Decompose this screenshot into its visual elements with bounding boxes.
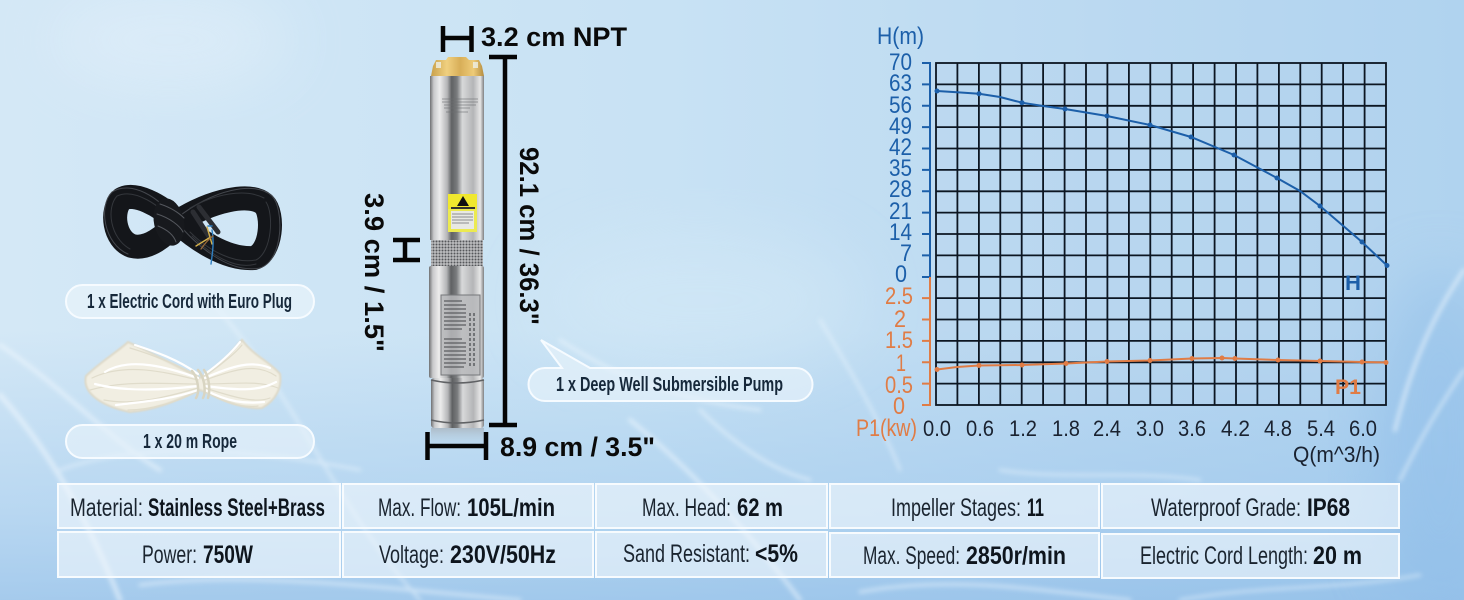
- spec: max flow: Max. Flow:: [378, 494, 461, 522]
- spec: max speed: Max. Speed:: [863, 542, 960, 570]
- head axis labels: 21: [889, 198, 912, 225]
- dimension: 92.1 cm / 36.3 in height: 92.1 cm / 36.3": [514, 147, 544, 325]
- spec: impeller stages: 11: [1027, 494, 1044, 522]
- flow axis labels: 1.2: [1009, 416, 1037, 441]
- power axis labels: 0.5: [885, 372, 913, 399]
- engraved top marking: [442, 99, 478, 112]
- spec: power: 750W: [203, 541, 253, 569]
- callout: deep well submersible pump: 1 x Deep Well Submersible Pump: [556, 374, 783, 396]
- motor nameplate: [441, 295, 480, 375]
- spec: max head: Max. Head:: [642, 494, 731, 522]
- head axis labels: 0: [895, 261, 907, 288]
- dimension: 8.9 cm / 3.5 in: [428, 432, 655, 462]
- left axis: power: [922, 277, 930, 405]
- flow axis labels: 2.4: [1093, 416, 1121, 441]
- flow axis labels: 0.6: [966, 416, 994, 441]
- chart grid: [936, 63, 1386, 405]
- P1 curve label: P1: [1335, 376, 1361, 399]
- flow axis labels: 1.8: [1052, 416, 1080, 441]
- flow axis labels: 6.0: [1349, 416, 1377, 441]
- spec: sand resistant: Sand Resistant:: [623, 540, 750, 568]
- spec: material: Material:: [70, 494, 143, 522]
- pill: electric cord label: 1 x Electric Cord with Euro Plug: [87, 291, 292, 313]
- flow axis labels: 3.0: [1136, 416, 1164, 441]
- dimension: 8.9 cm / 3.5 in: 8.9 cm / 3.5": [500, 432, 655, 462]
- pill: electric cord label: [66, 285, 314, 318]
- head axis labels: 42: [889, 134, 912, 161]
- flow axis labels: 0.0: [923, 416, 951, 441]
- left axis: head: [922, 63, 930, 277]
- flow axis labels: 3.6: [1178, 416, 1206, 441]
- pill: rope label: [66, 425, 314, 458]
- brass top fitting: [431, 57, 484, 76]
- dimension: 92.1 cm / 36.3 in height: [489, 57, 544, 425]
- spec: max speed: [830, 533, 1099, 577]
- base reflection: [431, 428, 484, 448]
- spec: voltage: Voltage:: [379, 541, 444, 569]
- spec: impeller stages: Impeller Stages:: [891, 494, 1021, 522]
- spec: max head: [596, 484, 827, 528]
- flow axis labels: 4.8: [1264, 416, 1292, 441]
- head axis labels: 70: [889, 49, 912, 76]
- head axis labels: [877, 23, 924, 288]
- warning label: [448, 194, 477, 232]
- performance chart: [856, 23, 1390, 467]
- power axis labels: 1: [896, 350, 906, 377]
- spec: sand resistant: [596, 532, 827, 577]
- flow axis labels: 5.4: [1307, 416, 1335, 441]
- steel motor section: [429, 266, 484, 378]
- spec: max head: 62 m: [737, 494, 783, 522]
- P1 curve: [934, 356, 1388, 372]
- spec: max flow: [343, 484, 593, 528]
- dimension: 3.9 cm / 1.5 in: [359, 193, 420, 352]
- spec: electric cord length: 20 m: [1313, 542, 1362, 570]
- spec: max speed: 2850r/min: [966, 542, 1066, 570]
- power axis labels: 2.5: [885, 283, 913, 310]
- spec table: [58, 484, 1399, 578]
- pump product image: [429, 57, 484, 448]
- head axis labels: 7: [900, 240, 912, 267]
- H curve: [934, 88, 1390, 268]
- flow axis labels: 4.2: [1221, 416, 1250, 441]
- spec: sand resistant: <5%: [755, 540, 798, 568]
- spec: impeller stages: [830, 484, 1099, 528]
- head axis labels: 49: [889, 113, 912, 140]
- head axis labels: 63: [889, 70, 912, 97]
- spec: max flow: 105L/min: [467, 494, 555, 522]
- head axis labels: 14: [889, 219, 912, 246]
- spec: material: [58, 484, 340, 528]
- power axis labels: 2: [894, 306, 906, 333]
- spec: waterproof grade: [1102, 484, 1399, 528]
- head axis labels: H(m): [877, 23, 924, 50]
- power axis labels: P1(kw): [856, 415, 917, 442]
- head axis labels: 28: [889, 176, 912, 203]
- spec: material: Stainless Steel+Brass: [148, 494, 325, 522]
- spec: electric cord length: Electric Cord Length:: [1140, 542, 1308, 570]
- spec: voltage: [343, 532, 593, 577]
- spec: voltage: 230V/50Hz: [450, 541, 556, 569]
- power axis labels: 1.5: [885, 327, 913, 354]
- dimension: 3.2 cm NPT: 3.2 cm NPT: [481, 22, 628, 52]
- H curve label: H: [1345, 272, 1361, 295]
- steel base: [431, 378, 484, 428]
- power axis labels: 0: [893, 393, 905, 420]
- callout: deep well submersible pump: [528, 340, 812, 401]
- mesh intake: [431, 240, 483, 266]
- icon: electric cord coil: [105, 188, 280, 269]
- head axis labels: 35: [889, 155, 912, 182]
- steel upper tube: [430, 76, 484, 240]
- spec: power: Power:: [142, 541, 197, 569]
- dimension: 3.9 cm / 1.5 in: 3.9 cm / 1.5": [359, 193, 389, 352]
- icon: white rope coil: [85, 340, 280, 412]
- spec: power: [58, 532, 340, 577]
- power axis labels: [856, 283, 917, 442]
- pill: rope label: 1 x 20 m Rope: [143, 431, 237, 453]
- head axis labels: 56: [889, 92, 912, 119]
- spec: waterproof grade: Waterproof Grade:: [1151, 494, 1301, 522]
- flow axis labels: Q(m^3/h): [1293, 442, 1380, 467]
- spec: electric cord length: [1102, 534, 1399, 578]
- spec: waterproof grade: IP68: [1307, 494, 1350, 522]
- flow axis labels: [923, 416, 1380, 467]
